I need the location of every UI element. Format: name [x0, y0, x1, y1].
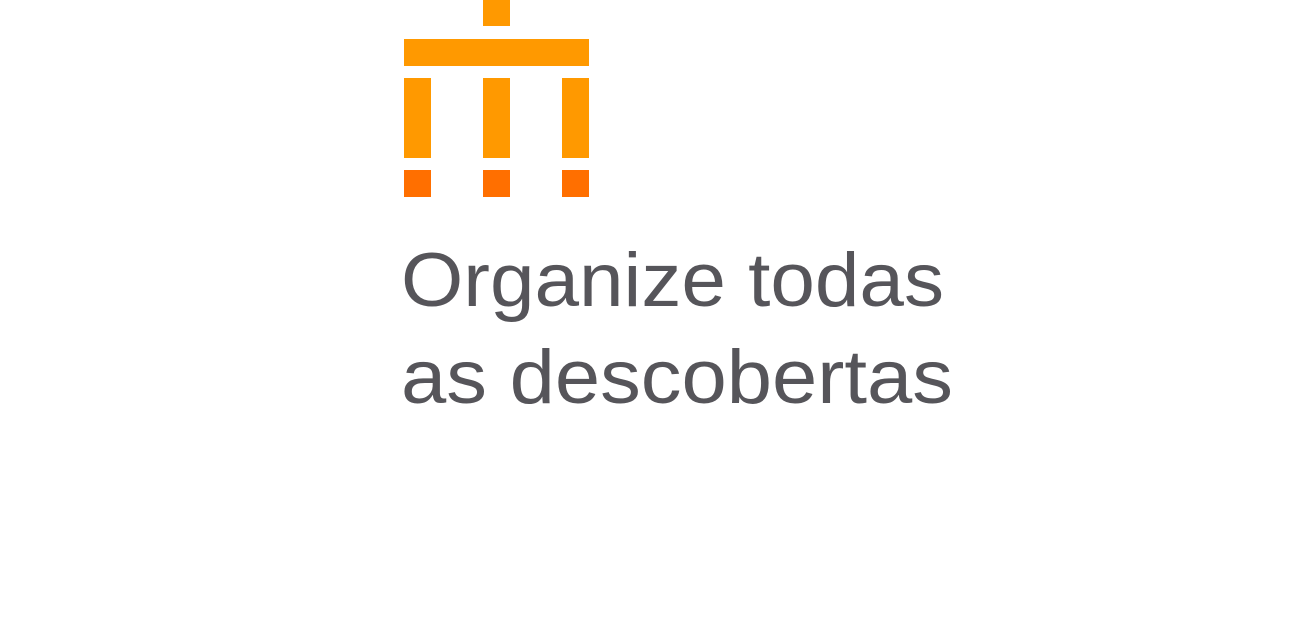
title text: Organize todas [401, 238, 944, 323]
title text [401, 238, 953, 420]
title text: as descobertas [401, 335, 953, 420]
icon: orange bracket logo [404, 0, 589, 197]
